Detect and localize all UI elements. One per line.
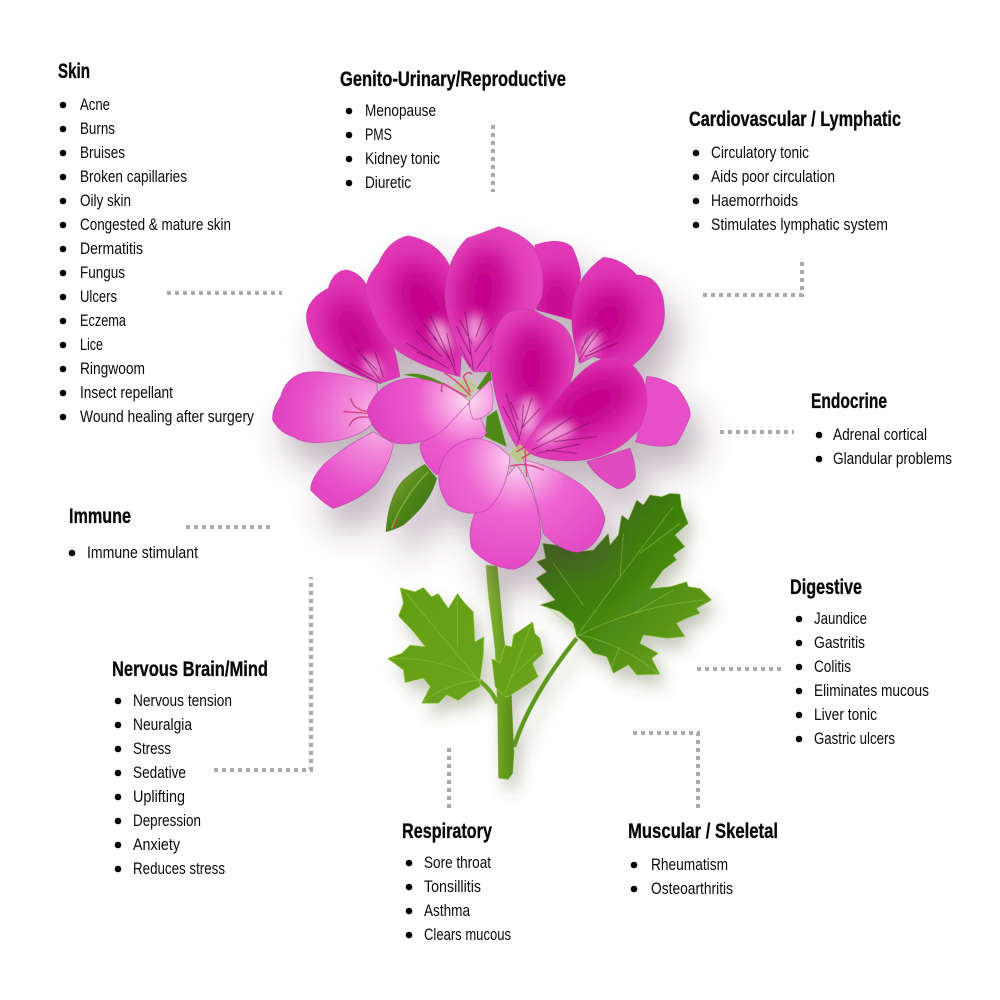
heading: nervous: Nervous Brain/Mind [112, 658, 268, 681]
connector: nervous [214, 577, 311, 770]
panel: skin [58, 60, 254, 426]
list: muscular: Osteoarthritis [651, 879, 733, 898]
panel: digestive [790, 576, 929, 748]
list: immune: Immune stimulant [87, 543, 198, 562]
main stem [486, 565, 514, 779]
plant stem and leaves [387, 493, 712, 779]
back flower petals [535, 241, 690, 489]
connector: endocrine [720, 430, 794, 434]
heading: muscular: Muscular / Skeletal [628, 820, 778, 843]
connector: muscular [633, 733, 698, 808]
list: cardiovascular: Haemorrhoids [711, 191, 798, 210]
connector: cardiovascular [703, 262, 802, 295]
list: cardiovascular: Aids poor circulation [711, 167, 835, 186]
list: cardiovascular [693, 143, 888, 234]
list: nervous [115, 691, 232, 878]
panel: endocrine [811, 390, 952, 468]
panel: immune [69, 505, 198, 562]
panel: muscular [628, 820, 778, 898]
list: respiratory: Sore throat [424, 853, 491, 872]
list: nervous: Anxiety [133, 835, 180, 854]
stem branches [478, 638, 577, 747]
center flower petals [365, 227, 543, 475]
list: skin: Dermatitis [80, 239, 143, 258]
list: genito-urinary: Kidney tonic [365, 149, 440, 168]
list: muscular [631, 855, 733, 898]
heading: genito-urinary: Genito-Urinary/Reproductive [340, 68, 566, 91]
connector: skin [167, 291, 282, 295]
list: respiratory: Clears mucous [424, 925, 511, 944]
small middle leaf [492, 622, 543, 697]
list: nervous: Neuralgia [133, 715, 192, 734]
list: endocrine: Glandular problems [833, 449, 952, 468]
heading: skin: Skin [58, 60, 90, 83]
list: skin: Ringwoom [80, 359, 145, 378]
list: genito-urinary: PMS [365, 125, 392, 144]
list: skin: Eczema [80, 311, 126, 330]
list: nervous: Reduces stress [133, 859, 225, 878]
connector: genito-urinary [491, 125, 495, 192]
list: digestive: Eliminates mucous [814, 681, 929, 700]
list: skin: Lice [80, 335, 103, 354]
list: genito-urinary: Diuretic [365, 173, 411, 192]
list: endocrine [816, 425, 952, 468]
list: skin: Wound healing after surgery [80, 407, 254, 426]
list: digestive: Gastric ulcers [814, 729, 895, 748]
list: skin: Congested & mature skin [80, 215, 231, 234]
list: skin: Insect repellant [80, 383, 173, 402]
heading: cardiovascular: Cardiovascular / Lymphatic [689, 108, 901, 131]
panel: nervous [112, 658, 268, 878]
panel: genito-urinary [340, 68, 566, 192]
list: skin: Broken capillaries [80, 167, 187, 186]
list: nervous: Depression [133, 811, 201, 830]
list: nervous: Sedative [133, 763, 186, 782]
list: digestive [796, 609, 929, 748]
list: respiratory: Asthma [424, 901, 470, 920]
connector: respiratory [447, 748, 451, 808]
front flower petals [439, 309, 647, 569]
list: nervous: Uplifting [133, 787, 185, 806]
list: endocrine: Adrenal cortical [833, 425, 927, 444]
heading: endocrine: Endocrine [811, 390, 887, 413]
list: skin: Oily skin [80, 191, 131, 210]
large right leaf [536, 493, 712, 675]
list: digestive: Jaundice [814, 609, 867, 628]
heading: immune: Immune [69, 505, 131, 528]
list: cardiovascular: Stimulates lymphatic system [711, 215, 888, 234]
list: digestive: Liver tonic [814, 705, 877, 724]
flower cluster [273, 227, 690, 569]
list: skin: Ulcers [80, 287, 117, 306]
heading: digestive: Digestive [790, 576, 862, 599]
list: respiratory [406, 853, 511, 944]
list: skin: Bruises [80, 143, 125, 162]
connector: immune [186, 525, 273, 529]
list: muscular: Rheumatism [651, 855, 728, 874]
geranium illustration [273, 227, 712, 779]
list: skin: Burns [80, 119, 115, 138]
list: skin [60, 95, 254, 426]
list: digestive: Colitis [814, 657, 851, 676]
list: nervous: Stress [133, 739, 171, 758]
list: respiratory: Tonsillitis [424, 877, 481, 896]
bud [386, 464, 437, 532]
connector: digestive [697, 667, 781, 671]
list: cardiovascular: Circulatory tonic [711, 143, 809, 162]
list: nervous: Nervous tension [133, 691, 232, 710]
panel: cardiovascular [689, 108, 901, 234]
small left leaf [387, 587, 484, 703]
list: skin: Acne [80, 95, 110, 114]
list: genito-urinary [346, 101, 440, 192]
panel: respiratory [402, 820, 511, 944]
list: skin: Fungus [80, 263, 125, 282]
left flower petals [273, 270, 400, 508]
list: digestive: Gastritis [814, 633, 865, 652]
list: genito-urinary: Menopause [365, 101, 436, 120]
heading: respiratory: Respiratory [402, 820, 492, 843]
